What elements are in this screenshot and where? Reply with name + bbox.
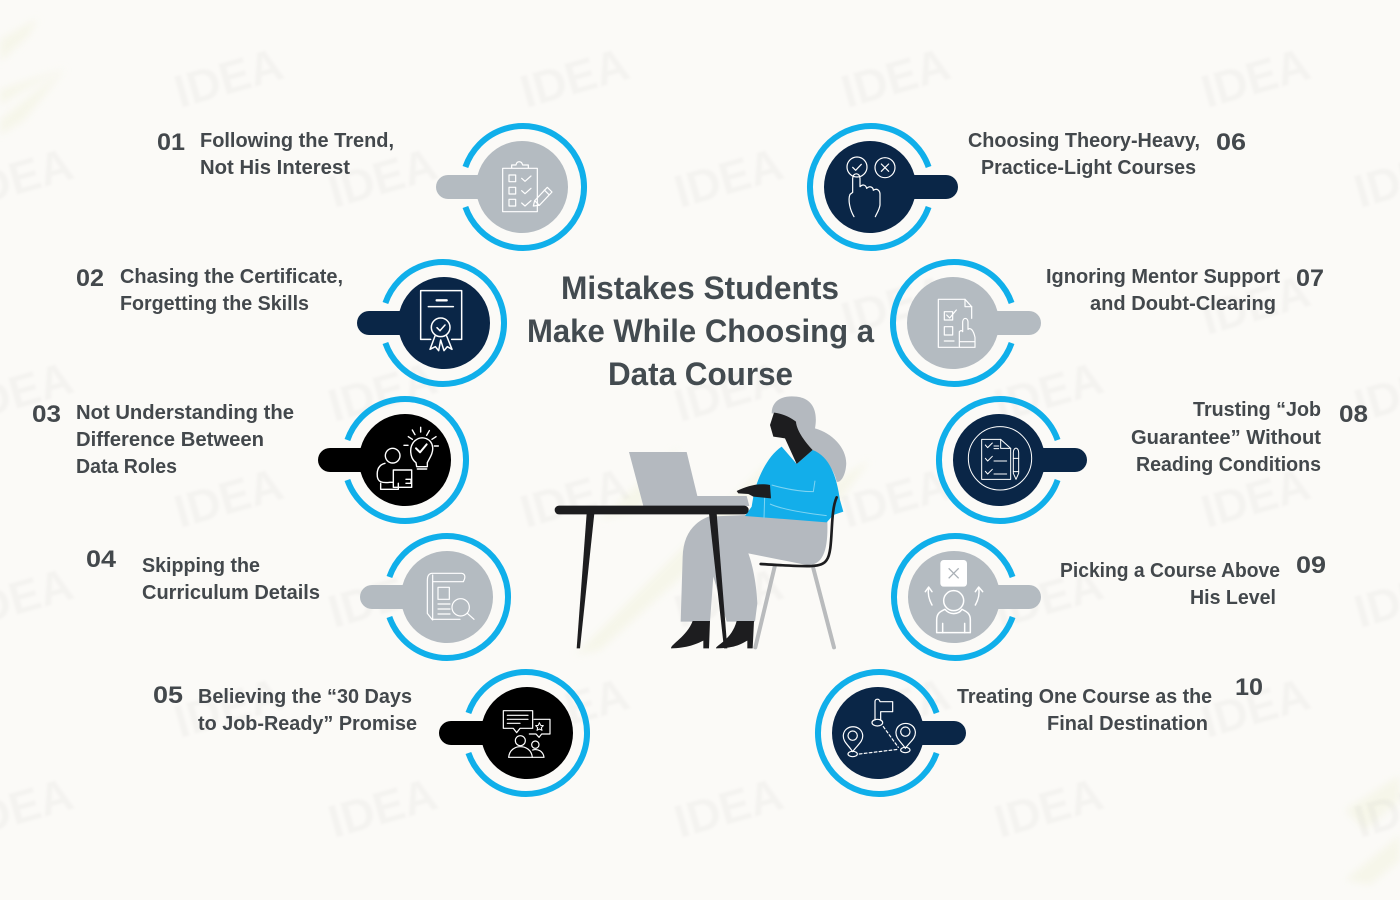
shirt fold lines [764, 481, 827, 518]
ring 07 [893, 262, 1012, 384]
watermarks: IDEA [1195, 264, 1315, 345]
watermarks: IDEA [322, 351, 442, 432]
ring 09 [894, 536, 1013, 658]
label 08 [1131, 399, 1321, 476]
number 04: 04 [86, 546, 117, 573]
label 09: His Level [1190, 587, 1276, 609]
hand [737, 484, 771, 498]
label 06: Practice-Light Courses [981, 157, 1196, 179]
laptop [629, 452, 749, 506]
number 08: 08 [1339, 401, 1368, 428]
watermarks: IDEA [835, 667, 955, 748]
number 09: 09 [1296, 552, 1326, 579]
icon: person with rejected option [925, 560, 983, 633]
watermarks: IDEA [668, 767, 788, 848]
icon: checklist in a circle [968, 427, 1032, 490]
ring 05 [468, 672, 587, 794]
watermarks: IDEA [835, 457, 955, 538]
watermarks: IDEA [514, 667, 634, 748]
badge 10 [832, 687, 966, 779]
label 08: Guarantee” Without [1131, 427, 1321, 449]
label 10: Treating One Course as the [957, 686, 1212, 708]
ring 02 [385, 262, 504, 384]
icon: discussion bubbles and people [503, 711, 550, 757]
number 05: 05 [153, 682, 183, 709]
table legs [577, 513, 727, 648]
label 10 [957, 686, 1212, 735]
watermarks: IDEA [668, 557, 788, 638]
number 10: 10 [1235, 674, 1263, 701]
label 08: Reading Conditions [1136, 454, 1321, 476]
badge 08 [953, 414, 1087, 506]
label 01 [200, 130, 394, 179]
label 07: and Doubt-Clearing [1090, 293, 1276, 315]
label 03: Not Understanding the [76, 402, 294, 424]
ring 06 [810, 126, 929, 248]
label 06: Choosing Theory-Heavy, [968, 130, 1200, 152]
title: Data Course [608, 356, 793, 392]
watermarks: IDEA [835, 37, 955, 118]
label 09 [1060, 560, 1280, 609]
item 06 [810, 126, 1246, 248]
shoes [671, 621, 754, 648]
label 07 [1046, 266, 1280, 315]
item 07 [893, 262, 1324, 384]
label 03: Difference Between [76, 429, 264, 451]
badge 03 [318, 414, 451, 506]
number 07: 07 [1296, 265, 1324, 292]
table top [555, 506, 749, 514]
illustration: student at desk with laptop [555, 396, 846, 648]
watermarks: IDEA [988, 767, 1108, 848]
icon: hand choosing check or cross [847, 157, 895, 217]
ring 03 [347, 399, 466, 521]
item 08 [939, 399, 1368, 521]
ring 04 [389, 536, 508, 658]
watermarks: IDEA [1195, 37, 1315, 118]
label 02: Chasing the Certificate, [120, 266, 343, 288]
watermarks: IDEA [168, 457, 288, 538]
number 03: 03 [32, 401, 61, 428]
label 09: Picking a Course Above [1060, 560, 1280, 582]
chair back [761, 497, 837, 566]
item 05 [153, 672, 587, 794]
label 02: Forgetting the Skills [120, 293, 309, 315]
hair [772, 396, 846, 482]
watermarks: IDEA [168, 37, 288, 118]
watermarks: IDEA [322, 557, 442, 638]
item 10 [818, 672, 1263, 794]
ring 10 [818, 672, 937, 794]
label 03: Data Roles [76, 456, 177, 478]
watermarks: IDEA [322, 767, 442, 848]
badge 06 [824, 141, 958, 233]
watermarks: IDEA [168, 667, 288, 748]
number 01: 01 [157, 129, 185, 156]
icon: checklist and pencil [503, 162, 552, 212]
label 10: Final Destination [1047, 713, 1208, 735]
label 07: Ignoring Mentor Support [1046, 266, 1280, 288]
icon: map route with flag and pins [843, 699, 915, 757]
title: Mistakes Students [561, 270, 839, 306]
icon: person with light bulb [377, 427, 438, 489]
label 04: Skipping the [142, 555, 260, 577]
chair legs [755, 567, 834, 647]
label 05: Believing the “30 Days [198, 686, 412, 708]
icon: form with pointing hand [938, 299, 975, 347]
trousers [681, 515, 827, 622]
label 05 [198, 686, 417, 735]
watermarks: IDEA [668, 351, 788, 432]
icon: document search [427, 573, 474, 620]
badge 02 [357, 277, 490, 369]
label 05: to Job-Ready” Promise [198, 713, 417, 735]
watermarks: IDEA [668, 137, 788, 218]
label 04 [142, 555, 320, 604]
label 08: Trusting “Job [1193, 399, 1321, 421]
watermarks: IDEA [1195, 457, 1315, 538]
ring 01 [465, 126, 584, 248]
badge 04 [360, 551, 493, 643]
title: Make While Choosing a [527, 313, 874, 349]
watermarks: IDEA [514, 457, 634, 538]
badge 05 [439, 687, 573, 779]
badge 01 [436, 141, 568, 233]
title [527, 270, 874, 392]
badge 07 [907, 277, 1041, 369]
label 03 [76, 402, 294, 478]
number 02: 02 [76, 265, 104, 292]
item 04 [86, 536, 508, 658]
shirt [745, 447, 843, 522]
label 01: Not His Interest [200, 157, 350, 179]
label 01: Following the Trend, [200, 130, 394, 152]
face and neck [770, 413, 813, 464]
item 09 [894, 536, 1326, 658]
watermarks: IDEA [514, 37, 634, 118]
item 01 [157, 126, 584, 248]
item 03 [32, 399, 466, 521]
label 04: Curriculum Details [142, 582, 320, 604]
label 02 [120, 266, 343, 315]
watermarks: IDEA [988, 557, 1108, 638]
badge 09 [908, 551, 1041, 643]
number 06: 06 [1216, 129, 1246, 156]
watermarks: IDEA [1195, 667, 1315, 748]
icon: certificate [421, 291, 462, 351]
item 02 [76, 262, 504, 384]
label 06 [968, 130, 1200, 179]
watermarks: IDEA [988, 351, 1108, 432]
ring 08 [939, 399, 1058, 521]
watermarks: IDEA [835, 264, 955, 345]
watermarks: IDEA [322, 137, 442, 218]
